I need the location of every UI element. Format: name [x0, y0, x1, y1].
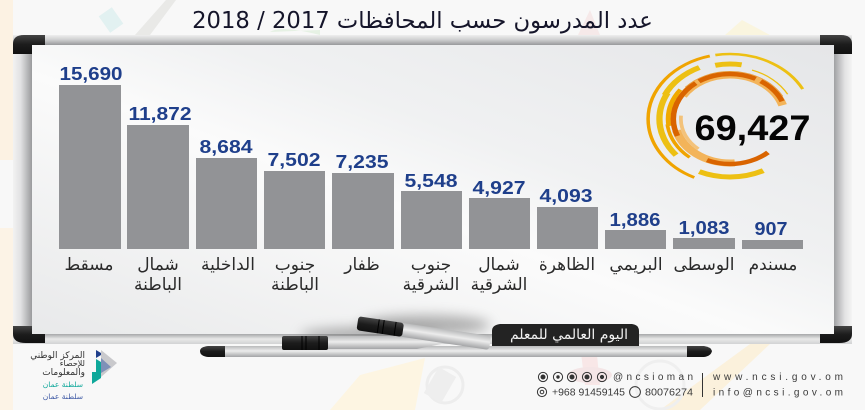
banner: World Teachers' Day: اليوم العالمي للمعلم: [510, 327, 628, 343]
bar: South Ash Sharqiyah: جنوب: [411, 255, 451, 275]
footer: social and contact: [537, 372, 843, 398]
handle: @ncsioman: [613, 372, 693, 383]
bar: Ad Dhahirah: [537, 186, 598, 275]
bar: Dhofar: [332, 152, 394, 275]
bar: Musandam: مسندم: [749, 255, 797, 275]
bar: North Al Batinah: 11,872: [128, 104, 192, 124]
logo: NCSI: [30, 350, 117, 401]
bar chart: [59, 64, 803, 295]
social icons: [537, 372, 640, 397]
bar: North Al Batinah: [127, 104, 192, 295]
bar: Al Buraimi: البريمي: [609, 255, 663, 275]
total callout with ring graphic: [648, 54, 812, 184]
bar: Muscat: 15,690: [60, 64, 122, 84]
bar: North Ash Sharqiyah: [469, 178, 530, 295]
middle marker: [282, 336, 480, 350]
bar: Ad Dakhiliyah: الداخلية: [201, 255, 255, 275]
bar: Ad Dakhiliyah: [196, 137, 257, 275]
bar: South Ash Sharqiyah: 5,548: [404, 171, 458, 191]
bar: Ad Dhahirah: الظاهرة: [539, 255, 595, 275]
website: www.ncsi.gov.om: [712, 372, 843, 383]
bar: Musandam: [742, 219, 803, 275]
ring graphic: [648, 54, 812, 184]
phone number: +968 91459145: [552, 386, 625, 398]
email: info@ncsi.gov.om: [713, 388, 843, 398]
bar: Al Wusta: الوسطى: [673, 255, 735, 275]
bar: North Ash Sharqiyah: 4,927: [472, 178, 526, 198]
bar: Ad Dhahirah: 4,093: [540, 186, 592, 206]
logo text: سلطنة عمان: [43, 380, 83, 389]
bar: Ad Dakhiliyah: 8,684: [200, 137, 252, 157]
bar: Al Wusta: [673, 218, 735, 275]
bar: North Al Batinah: الباطنة: [134, 275, 182, 295]
total value: 69,427: [694, 109, 810, 148]
panel: whiteboard: [13, 35, 852, 344]
long marker: [200, 346, 712, 357]
bar: North Al Batinah: شمال: [137, 255, 179, 275]
bar: Al Wusta: 1,083: [678, 218, 730, 238]
logo text: [30, 351, 85, 401]
banner: World Teachers' Day: [492, 324, 639, 346]
bar: Musandam: 907: [754, 219, 788, 239]
title: عدد المدرسون حسب المحافظات 2017 / 2018: [192, 8, 653, 34]
toll-free number: 80076274: [645, 386, 693, 398]
tilted marker: [356, 316, 491, 350]
bar: Al Buraimi: 1,886: [610, 210, 660, 230]
bar: Muscat: مسقط: [64, 255, 114, 275]
bar: South Al Batinah: جنوب: [275, 255, 315, 275]
logo text: المركز الوطني: [30, 351, 85, 361]
bar: South Al Batinah: الباطنة: [271, 275, 319, 295]
bar: North Ash Sharqiyah: الشرقية: [471, 275, 527, 295]
pens and markers: [200, 315, 712, 357]
bar: Dhofar: 7,235: [336, 152, 388, 172]
bar: Muscat: [59, 64, 122, 275]
divider: [702, 373, 703, 397]
bar: South Ash Sharqiyah: [401, 171, 462, 295]
bar: South Al Batinah: 7,502: [268, 150, 320, 170]
bar: Al Buraimi: [605, 210, 666, 275]
bar: Dhofar: ظفار: [343, 255, 380, 275]
bar: South Ash Sharqiyah: الشرقية: [403, 275, 459, 295]
bar: South Al Batinah: [264, 150, 325, 295]
logo text: والمعلومات: [42, 368, 85, 378]
logo text: للإحصاء: [60, 359, 85, 369]
logo text: سلطنة عمان: [43, 392, 83, 401]
bar: North Ash Sharqiyah: شمال: [478, 255, 520, 275]
logo mark: [92, 350, 117, 384]
